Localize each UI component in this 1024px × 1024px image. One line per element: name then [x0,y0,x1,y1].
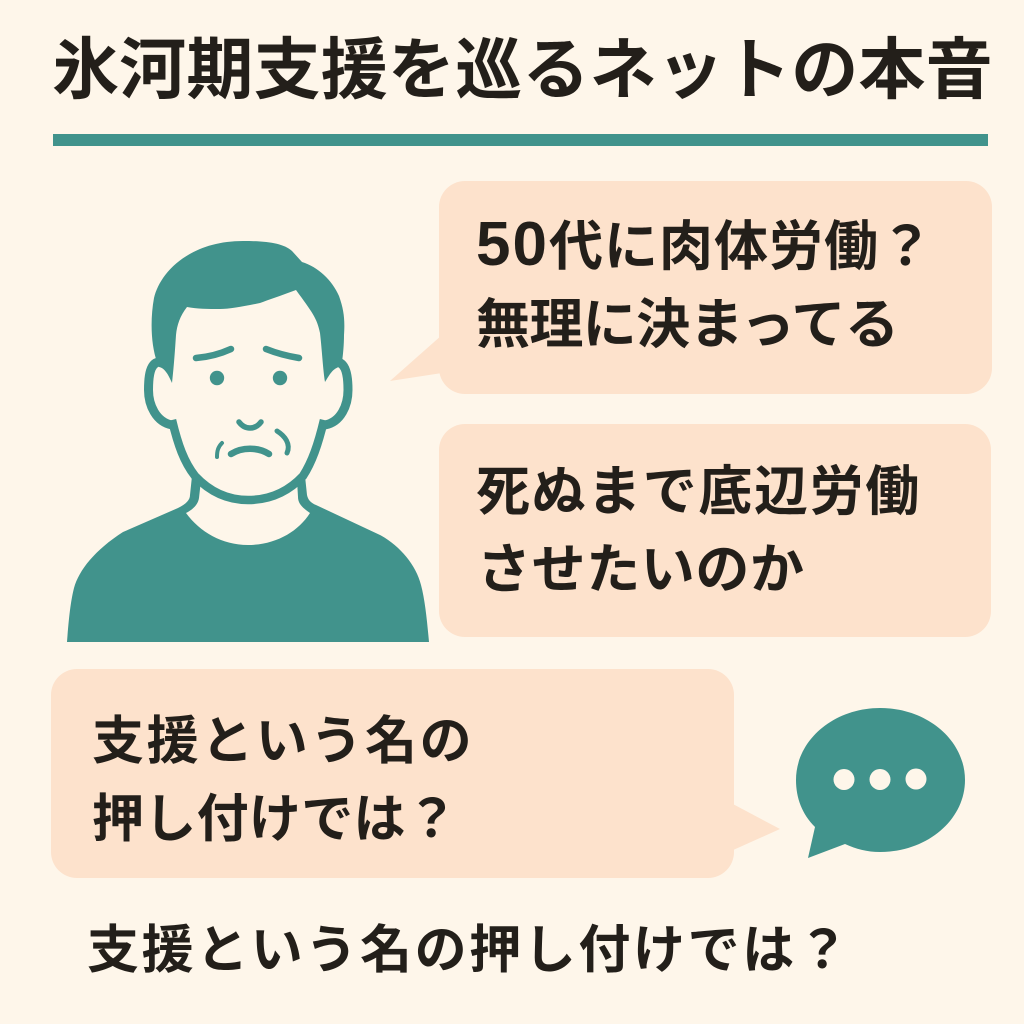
eyes [210,371,287,385]
bubble 3 line 1: 支援という名の [92,713,474,771]
icon: worried man [67,241,429,642]
bubble 1 line 1: 50代に肉体労働？ [476,210,934,279]
bubble shape [796,708,965,858]
wrinkles [217,431,288,457]
speech bubble 2 [439,424,991,637]
bubble 1 line 2: 無理に決まってる [476,295,898,355]
brows [196,349,299,358]
footer text: 支援という名の押し付けでは？ [87,922,851,980]
speech bubble 3 [51,669,780,878]
icon: chat bubble [796,708,965,858]
mouth [231,449,269,454]
dots [834,768,926,790]
hair [152,241,344,383]
jaw outline [172,420,324,500]
face [172,285,324,500]
bubble 3 line 2: 押し付けでは？ [92,791,458,849]
speech bubble 1 [390,181,992,394]
title underline [53,134,988,146]
ears [148,362,348,425]
title: 氷河期支援を巡るネットの本音 [52,33,993,108]
shirt [67,476,429,642]
bubble 2 line 2: させたいのか [477,540,805,600]
bubble 2 line 1: 死ぬまで底辺労働 [476,462,921,522]
nose [239,422,261,428]
